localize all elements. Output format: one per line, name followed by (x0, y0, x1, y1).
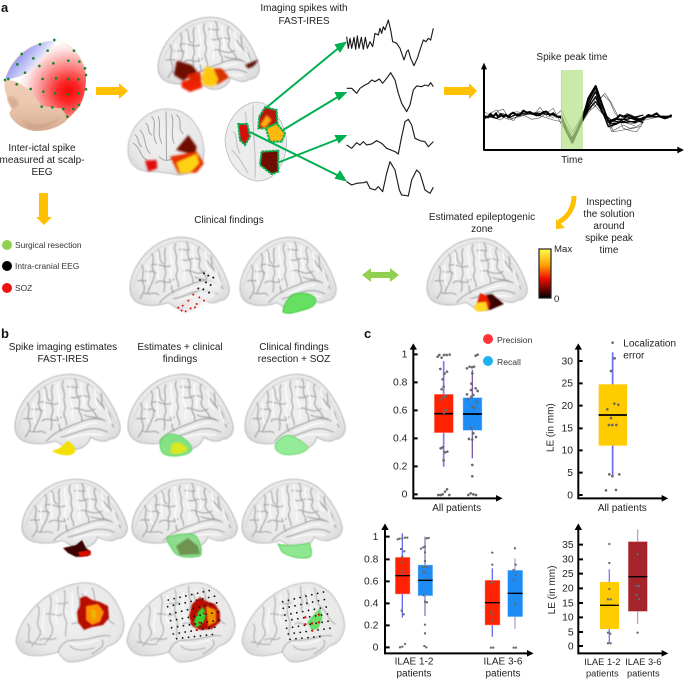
boxplot: precision and recall by ILAE (364, 523, 534, 679)
column headings: Clinical findings (259, 342, 329, 353)
data points (436, 353, 479, 496)
legend: precision and recall (483, 334, 533, 367)
arrow: traces to spike plot (444, 83, 477, 99)
colorbar: 0 (554, 294, 559, 305)
boxplot: precision and recall, all patients: 0.4 (393, 434, 408, 445)
caption: inspecting: spike peak (585, 233, 634, 244)
time courses (347, 20, 433, 196)
boxplot: localization error by ILAE: patients (586, 668, 619, 678)
boxplot: precision and recall by ILAE: 1 (373, 532, 379, 543)
boxplot: localization error, all patients: 15 (561, 424, 573, 435)
boxplot: localization error by ILAE: 35 (562, 540, 574, 551)
colorbar (539, 244, 572, 305)
colorbar: Max (554, 244, 572, 255)
brain: bottom view with outlined regions (225, 102, 287, 181)
boxplot: precision and recall, all patients: 0.2 (393, 462, 408, 473)
caption: estimated epileptogenic zone: Estimated epileptogenic (429, 212, 535, 223)
arrow: head to imaging (96, 83, 128, 99)
boxplot: precision and recall by ILAE: ILAE 1-2 (395, 656, 434, 667)
column headings: Estimates + clinical (137, 342, 223, 353)
boxplot: localization error, all patients: LE (in mm) (546, 403, 557, 452)
arrow: down to clinical (36, 193, 52, 225)
boxplot: localization error by ILAE: 20 (562, 584, 574, 595)
electrode grid (283, 592, 332, 639)
panel c heading: c (364, 326, 371, 341)
brain: resection (240, 237, 336, 313)
boxplot: precision and recall, all patients: 0 (402, 490, 408, 501)
boxplot: localization error by ILAE: patients (627, 668, 660, 678)
y axis and ticks (412, 348, 497, 498)
boxplot: precision and recall by ILAE: 0.8 (364, 555, 379, 566)
caption: scalp EEG: Inter-ictal spike (8, 143, 76, 154)
boxplot: localization error by ILAE: 25 (562, 569, 574, 580)
boxplot: localization error, all patients: 30 (561, 356, 573, 367)
y axis and ticks (577, 348, 662, 498)
trace 2 (347, 73, 433, 112)
whiskers and boxes (607, 569, 611, 643)
legend: clinical markers: SOZ (15, 283, 32, 293)
caption: inspecting: around (593, 221, 625, 232)
brain: estimated zone (427, 238, 527, 312)
column headings: findings (163, 354, 197, 365)
arrow: curved to estimated zone (556, 196, 574, 229)
boxplot: precision and recall, all patients: 0.6 (393, 406, 408, 417)
boxplot: precision and recall, all patients (393, 343, 503, 514)
legend: localization error: error (623, 351, 645, 362)
column headings (9, 342, 330, 365)
boxplot: localization error by ILAE: 30 (562, 555, 574, 566)
row 2, estimates (22, 479, 127, 557)
column headings: Spike imaging estimates (9, 342, 117, 353)
thin waveforms (484, 89, 672, 140)
legend: precision and recall: Precision (497, 335, 533, 345)
head skin (4, 41, 86, 131)
boxplot: localization error by ILAE: 0 (568, 641, 574, 652)
highlight window (561, 71, 582, 150)
legend: precision and recall: Recall (497, 357, 521, 367)
data points (605, 341, 621, 492)
boxplot: precision and recall, all patients: 1 (402, 350, 408, 361)
whiskers and boxes (441, 361, 446, 467)
boxplot: localization error by ILAE: ILAE 3-6 (625, 657, 661, 667)
boxplot: precision and recall by ILAE: 0 (373, 643, 379, 654)
row 3, estimates (16, 583, 124, 662)
column headings: resection + SOZ (258, 354, 330, 365)
row 1, estimates (15, 374, 120, 455)
boxplot: localization error, all patients: 20 (561, 401, 573, 412)
boxplot: precision and recall by ILAE: 0.4 (364, 599, 379, 610)
potential map overlay (5, 41, 86, 118)
boxplot: precision and recall, all patients: All patients (432, 503, 481, 514)
electrodes (4, 39, 87, 118)
caption: scalp EEG: EEG (31, 167, 53, 178)
chart: butterfly plot of spikes (481, 63, 684, 153)
trace 4 (347, 162, 433, 196)
caption: estimated epileptogenic zone: zone (471, 224, 493, 235)
legend: clinical markers: Surgical resection (15, 240, 82, 250)
boxplot: precision and recall by ILAE: 0.2 (364, 621, 379, 632)
caption: clinical findings: Clinical findings (194, 215, 264, 226)
boxplot: precision and recall by ILAE: ILAE 3-6 (484, 656, 523, 667)
boxplot: localization error, all patients: 10 (561, 446, 573, 457)
legend: localization error: Localization (623, 339, 676, 350)
y axis and ticks (384, 528, 528, 653)
row 1, overlap (128, 374, 233, 456)
caption: scalp EEG: measured at scalp- (0, 155, 85, 166)
brain: side view with activation (158, 17, 259, 92)
row 3, clinical with electrodes (242, 583, 345, 662)
boxplot: precision and recall by ILAE: 0.6 (364, 577, 379, 588)
trace 3 (347, 119, 433, 154)
boxplot: localization error, all patients: 0 (567, 490, 573, 501)
electrode grid (168, 590, 222, 639)
boxplot: localization error, all patients: 25 (561, 379, 573, 390)
brain: back view with activation (128, 109, 204, 175)
row 3, overlap with electrodes (127, 583, 235, 662)
data points (607, 543, 640, 644)
legend: clinical markers: Intra-cranial EEG (15, 261, 79, 271)
row 2, overlap (132, 479, 237, 557)
boxplot: localization error by ILAE: ILAE 1-2 (584, 657, 620, 667)
brain: electrodes and SOZ (130, 237, 229, 314)
caption: inspecting: Inspecting (586, 197, 632, 208)
legend: clinical markers (2, 240, 82, 293)
panel a heading: a (1, 0, 9, 15)
data points (396, 536, 517, 649)
axes (483, 68, 678, 150)
boxplot: localization error, all patients (546, 339, 676, 514)
caption: imaging spikes: FAST-IRES (278, 16, 330, 27)
caption: inspecting: the solution (583, 209, 635, 220)
caption: imaging spikes: Imaging spikes with (260, 3, 348, 14)
caption: inspecting: time (600, 245, 619, 256)
row 2, clinical (242, 479, 342, 558)
arrow: double green (362, 268, 399, 282)
boxplot: localization error by ILAE: 5 (568, 627, 574, 638)
caption: spike peak time: Spike peak time (536, 52, 608, 63)
thick waveform bundle (484, 86, 672, 143)
whiskers and boxes (400, 533, 404, 618)
trace 1 (347, 20, 433, 66)
axis label: time: Time (561, 155, 583, 166)
whisker and box (610, 352, 615, 478)
boxplot: precision and recall, all patients: 0.8 (393, 378, 408, 389)
panel b heading: b (1, 326, 9, 341)
boxplot: localization error by ILAE: 10 (562, 613, 574, 624)
panel: scalp EEG head (4, 39, 87, 131)
column headings: FAST-IRES (37, 354, 89, 365)
negative potential overlay (5, 41, 55, 79)
y axis and ticks (577, 528, 662, 653)
row 1, clinical (245, 374, 345, 455)
legend: localization error (623, 339, 676, 362)
boxplot: localization error, all patients: All patients (598, 503, 647, 514)
boxplot: localization error by ILAE (547, 523, 668, 678)
boxplot: localization error by ILAE: LE (in mm) (547, 566, 558, 614)
boxplot: localization error by ILAE: 15 (562, 598, 574, 609)
arrows: source regions to time courses (250, 43, 345, 180)
face shading (7, 96, 60, 129)
boxplot: localization error, all patients: 5 (567, 468, 573, 479)
